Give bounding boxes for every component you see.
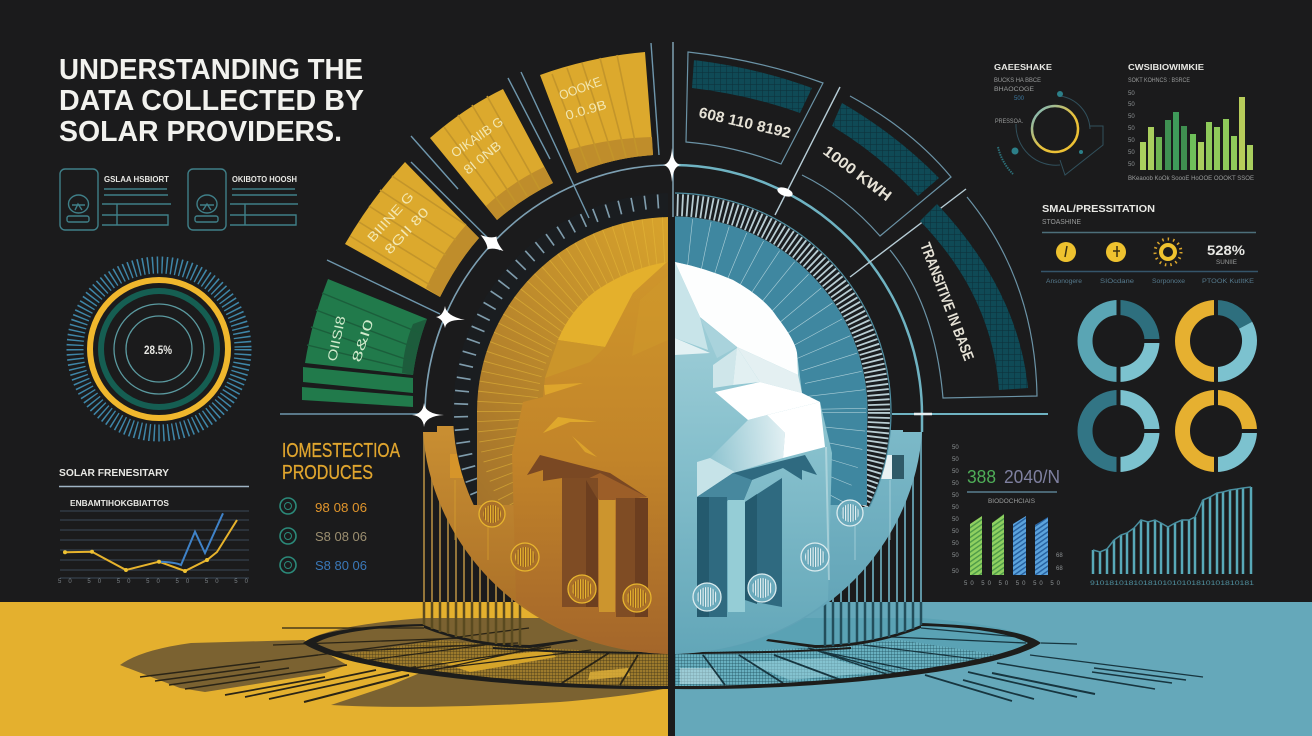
bowl: left half [423,426,668,654]
title [59,54,364,148]
ring gauge top right: 500 [1014,95,1024,102]
bar chart top right: 50 [1128,114,1135,120]
chart heading: 388 [967,467,996,487]
bowl: right half [675,430,922,654]
bar chart top right: 50 [1128,138,1135,144]
bar chart top right: SOKT KOHNCS : BSRCE [1128,77,1191,84]
hatched bar chart: 68 [1056,566,1063,572]
building right [675,262,832,654]
solar presentation panel: PTOOK KutItKE [1202,278,1255,285]
building left [512,262,668,654]
title: UNDERSTANDING THE [59,54,363,86]
axis lines [280,42,1048,414]
ring gauge top right: PRESSOA. [995,118,1023,125]
wedge: yellow 3 [345,162,479,297]
icon: helmet [67,195,89,222]
hatched bar chart: 2040/N [1004,467,1060,487]
wedge: yellow 2: 8I 0NB [460,138,504,177]
card heading: OKIBOTO HOOSH [232,175,297,184]
wedge label: OIISI8 [324,315,348,363]
bar chart top right [1128,63,1255,182]
hatched bar chart: 50 [952,505,959,511]
floor shadow [120,618,668,707]
ring gauge top right: BHAOCOGE [994,86,1035,93]
panel label: 1000 KWH [820,143,895,205]
gauge value: 28.5% [144,343,172,357]
wedge: green: 8&I0 [349,317,376,364]
white facets [675,262,798,375]
list row 3: S8 80 06 [315,558,367,573]
chart heading: SOLAR FRENESITARY [59,468,169,479]
panel heading: SMAL/PRESSITATION [1042,204,1155,215]
icon: helmet [195,195,218,222]
ring gauge top right: BUCKS HA BBCE [994,77,1042,84]
floor radial lines left [140,628,638,702]
hatched bar chart: 50 [952,553,959,559]
ring gauge top right [994,63,1103,175]
dark tick band right [675,192,892,507]
chart x labels: 50 50 50 50 50 50 [964,581,1061,587]
hatched bar chart: 50 [952,529,959,535]
radial gauge [75,265,243,433]
ground: yellow half [0,602,668,736]
wedge label: BIIINE G [364,189,417,245]
icon: coin 1 [1056,242,1076,262]
dark tick band left [454,194,660,505]
card: solar report 1 [60,169,171,230]
central divider [668,165,675,736]
line chart panel [58,468,249,585]
solar presentation panel: SIOcdane [1100,278,1134,285]
title: DATA COLLECTED BY [59,85,364,117]
area trend chart [1090,487,1254,587]
donut chart 4 [1182,388,1260,474]
chart axis labels: 50 50 50 50 50 50 50 [58,579,249,585]
solar presentation panel: SUNIIE [1216,260,1237,266]
chart x labels: 9101810181018101010101810101810181 [1090,580,1254,587]
solar presentation panel: STOASHINE [1042,219,1081,226]
wedge label: OIKAIIB G [448,114,506,160]
donut chart 3 [1085,388,1162,474]
arc ring right [675,165,922,432]
hatched bar chart: 50 [952,457,959,463]
bar chart top right: 50 [1128,150,1135,156]
floor grid band [340,640,1000,690]
coin icons left [479,501,651,612]
hatched bar chart: 50 [952,541,959,547]
icon: coin 2 [1106,242,1126,262]
bar chart top right: 50 [1128,126,1135,132]
panel: data 3 [890,197,1037,398]
donut chart 2 [1171,296,1261,386]
list heading: IOMESTECTIOA [282,440,401,462]
ground: blue half [675,602,1312,736]
pillars [562,478,598,607]
floor ring [303,623,1041,689]
solar presentation panel [1041,204,1258,285]
hatched bar chart: 50 [952,481,959,487]
hatched bar chart: 50 [952,493,959,499]
panel label: TRANSITIVE IN BASE [916,240,977,363]
donut chart 1 [1085,298,1162,384]
chart subheading: ENBAMTIHOKGBIATTOS [70,498,169,508]
markers: four-point stars [412,148,932,427]
bar chart top right: 50 [1128,102,1135,108]
wedge: green [302,279,427,407]
hatched bar chart [952,445,1063,587]
list row 2: S8 08 06 [315,529,367,544]
panel label: 608 110 8192 [697,104,793,142]
chart side labels: 68 [1056,553,1063,559]
solar presentation panel: Sorponoxe [1152,278,1185,285]
sun disc right [675,217,867,505]
hatched bar chart: 50 [952,569,959,575]
white square [876,455,892,479]
panel: data 1 [686,52,823,164]
chart heading: CWSIBIOWIMKIE [1128,63,1205,72]
card heading: GSLAA HSBIORT [104,175,169,184]
arc ring left [425,165,669,415]
bar chart top right: 50 [1128,162,1135,168]
list row 1: 98 08 06 [315,500,367,515]
dark roof [697,455,817,502]
wedge: yellow 1: 0.0.9B [564,97,608,123]
chart y labels: 50 [952,445,959,451]
orange square [450,454,467,478]
dark roof [527,455,647,501]
chart x labels: BKeaoob KoOk SoooE HoOOE OOOKT SSOE [1128,175,1255,182]
title: SOLAR PROVIDERS. [59,116,342,148]
hatched bar chart: 50 [952,469,959,475]
wedge: yellow 2 [430,89,553,220]
stat value: 528% [1207,242,1246,258]
stat labels: Ansonogere [1046,278,1082,285]
card: solar report 2 [188,169,298,230]
ring gauge top right: GAEESHAKE [994,63,1053,72]
floor radial lines right [703,628,1203,701]
icon: sun [1155,239,1181,265]
gold facets [558,262,667,347]
vertical bars behind bowl [424,432,921,646]
wedge: yellow 3: 8GII 80 [381,204,432,257]
sun disc left [477,217,668,505]
wedge label: OOOKE [557,74,604,103]
pillars [697,497,727,617]
panel: data 2 [802,96,951,236]
chart y labels: 50 [1128,91,1135,97]
wedge: yellow 1 [540,52,653,173]
hatched bar chart: BIODOCHCIAIS [988,498,1036,505]
coin icons right [693,500,863,611]
hatched bar chart: 50 [952,517,959,523]
producers list: PRODUCES [282,462,373,484]
producers list [280,440,401,573]
floor interior right [675,618,1041,688]
